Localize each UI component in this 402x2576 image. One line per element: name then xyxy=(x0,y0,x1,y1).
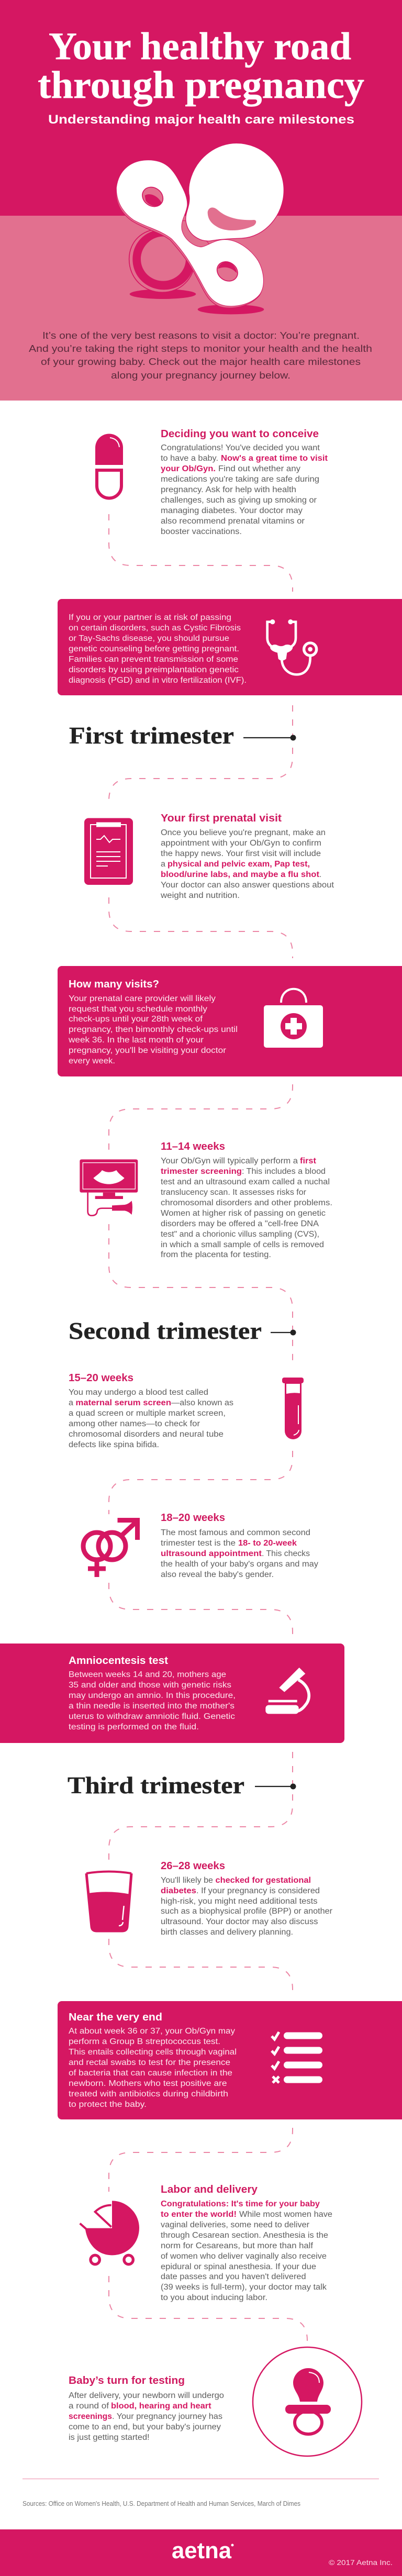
text block: 18-20 weeks xyxy=(161,1512,318,1579)
text block: 26-28 weeks: such as a biophysical profile (BPP) or another xyxy=(161,1907,332,1916)
title xyxy=(38,25,364,107)
heading: first trimester: First trimester xyxy=(69,723,234,749)
text block: first prenatal visit: . xyxy=(319,870,321,879)
text block: 15-20 weeks xyxy=(69,1372,233,1449)
text block: 11-14 weeks: trimester screening xyxy=(161,1167,242,1176)
text block: deciding you want to conceive: to have a baby. xyxy=(161,454,218,463)
text block: 26-28 weeks: 26–28 weeks xyxy=(161,1860,225,1872)
text block: 26-28 weeks: birth classes and delivery planning. xyxy=(161,1928,293,1937)
text block: 18-20 weeks: trimester test is the xyxy=(161,1539,236,1548)
text block: deciding you want to conceive: pregnancy. Ask for help with health xyxy=(161,485,296,494)
text: amniocentesis body: testing is performed on the fluid. xyxy=(69,1723,199,1731)
connector: path to near the very end panel xyxy=(109,1939,293,1993)
icon: clipboard xyxy=(84,818,133,885)
text: amniocentesis body: uterus to withdraw amniotic fluid. Genetic xyxy=(69,1712,235,1721)
text block: 15-20 weeks: defects like spina bifida. xyxy=(69,1440,159,1449)
text block: deciding you want to conceive: managing diabetes. Your doctor may xyxy=(161,506,303,515)
marker: first trimester xyxy=(243,735,296,740)
text block: baby's turn for testing: Baby’s turn for testing xyxy=(69,2375,185,2386)
text block: 11-14 weeks: from the placenta for testing. xyxy=(161,1250,271,1259)
text block: deciding you want to conceive: also recommend prenatal vitamins or xyxy=(161,517,305,526)
text block: baby's turn for testing: a round of xyxy=(69,2402,109,2411)
text block: 26-28 weeks: . If your pregnancy is considered xyxy=(196,1886,320,1895)
icon: checklist xyxy=(272,2032,322,2083)
text block: first prenatal visit: blood/urine labs, and maybe a flu shot xyxy=(161,870,319,879)
text: visits body xyxy=(68,994,238,1065)
text: near the very end body xyxy=(69,2027,237,2109)
text: near the very end body: to protect the baby. xyxy=(69,2100,147,2109)
text block: deciding you want to conceive xyxy=(161,428,328,536)
panel: hero header xyxy=(0,0,402,401)
text block: labor and delivery: to you about inducing labor. xyxy=(161,2293,267,2302)
text block: 15-20 weeks: among other names—to check for xyxy=(69,1419,200,1428)
text block: baby's turn for testing xyxy=(69,2375,224,2442)
text block: first prenatal visit: weight and nutrition. xyxy=(160,891,240,900)
text: visits body: Your prenatal care provider will likely xyxy=(69,994,216,1003)
text block: labor and delivery: (39 weeks is full-term), your doctor may talk xyxy=(161,2283,327,2292)
text block: 11-14 weeks: disorders may be offered a "cell-free DNA xyxy=(161,1219,319,1228)
text block: 11-14 weeks xyxy=(161,1141,332,1259)
text block: 18-20 weeks: ultrasound appointment xyxy=(161,1549,262,1558)
text: visits body: pregnancy, then bimonthly check-ups until xyxy=(69,1025,238,1034)
text block: 15-20 weeks: chromosomal disorders and neural tube xyxy=(69,1430,224,1439)
text block: 15-20 weeks: maternal serum screen xyxy=(75,1398,171,1407)
panel: near the very end xyxy=(58,2001,402,2119)
text: visits body: check-ups until your 28th week of xyxy=(69,1015,203,1024)
text block: 26-28 weeks: ultrasound. Your doctor may also discuss xyxy=(161,1917,318,1926)
text block: 11-14 weeks: test and an ultrasound exam called a nuchal xyxy=(161,1178,330,1186)
intro text: of your growing baby. Check out the major health care milestones xyxy=(41,357,361,367)
text block: labor and delivery: norm for Cesareans, but more than half xyxy=(161,2241,314,2250)
text block: 11-14 weeks: translucency scan. It assesses risks for xyxy=(161,1188,306,1197)
text: amniocentesis body: 35 and older and those with genetic risks xyxy=(69,1681,231,1690)
text block: 18-20 weeks: 18–20 weeks xyxy=(161,1512,225,1524)
connector: path through second trimester xyxy=(109,1224,293,1365)
text block: 15-20 weeks: a quad screen or multiple market screen, xyxy=(69,1409,226,1418)
intro text: And you’re taking the right steps to monitor your health and the health xyxy=(29,343,372,354)
text block: 11-14 weeks: 11–14 weeks xyxy=(161,1141,225,1152)
icon: large pacifier illustration xyxy=(116,143,284,314)
text: visits body: pregnancy, you'll be visiting your doctor xyxy=(69,1046,226,1055)
text block: baby's turn for testing: is just getting started! xyxy=(69,2433,150,2442)
text: amniocentesis body: may undergo an amnio. In this procedure, xyxy=(69,1691,236,1700)
text block: baby's turn for testing: come to an end, but your baby's journey xyxy=(69,2423,221,2431)
text: genetic counseling body: If you or your partner is at risk of passing xyxy=(69,613,231,622)
connector: path to visits panel xyxy=(109,897,293,958)
logo: aetna: aetna xyxy=(172,2538,232,2563)
text block: deciding you want to conceive: booster vaccinations. xyxy=(161,527,242,536)
text: genetic counseling body: disorders by using preimplantation genetic xyxy=(69,665,239,674)
text block: 11-14 weeks: first xyxy=(300,1157,316,1165)
text block: 18-20 weeks: 18- to 20-week xyxy=(238,1539,297,1548)
connector: path to labor and delivery xyxy=(109,2128,293,2192)
icon: microscope xyxy=(265,1668,309,1714)
text block: baby's turn for testing: screenings xyxy=(69,2412,112,2421)
text block: 11-14 weeks: chromosomal disorders and other problems. xyxy=(161,1198,332,1207)
sources: Sources: Office on Women's Health, U.S. Department of Health and Human Services, March of Dimes xyxy=(23,2500,300,2507)
text: genetic counseling body: on certain disorders, such as Cystic Fibrosis xyxy=(69,624,241,632)
text block: deciding you want to conceive: Find out whether any xyxy=(218,464,300,473)
text block: deciding you want to conceive: Deciding you want to conceive xyxy=(161,428,319,440)
text block: labor and delivery: Labor and delivery xyxy=(161,2184,258,2195)
icon: first aid kit xyxy=(264,989,323,1048)
icon: capsule xyxy=(95,434,123,498)
text block: baby's turn for testing: After delivery, your newborn will undergo xyxy=(69,2391,224,2400)
text block: 26-28 weeks xyxy=(161,1860,332,1937)
text block: 26-28 weeks: diabetes xyxy=(161,1886,196,1895)
text block: deciding you want to conceive: challenges, such as giving up smoking or xyxy=(161,496,317,505)
text: near the very end body: treated with antibiotics during childbirth xyxy=(69,2090,228,2098)
text block: first prenatal visit: Your doctor can also answer questions about xyxy=(161,881,334,890)
text block: 26-28 weeks: checked for gestational xyxy=(216,1876,311,1885)
text block: 15-20 weeks: a xyxy=(69,1398,73,1407)
connector: path to genetic counseling panel xyxy=(109,514,293,592)
text block: deciding you want to conceive: Now's a great time to visit xyxy=(221,454,328,463)
text: genetic counseling body xyxy=(69,613,247,685)
text: genetic counseling body: or Tay-Sachs disease, you should pursue xyxy=(69,634,229,643)
text block: first prenatal visit: a xyxy=(161,860,165,869)
text: near the very end body: newborn. Mothers who test positive are xyxy=(69,2079,227,2088)
text block: deciding you want to conceive: medications you're taking are safe during xyxy=(161,475,319,484)
icon: test tube xyxy=(282,1378,304,1439)
intro text: along your pregnancy journey below. xyxy=(111,370,291,381)
text: genetic counseling body: diagnosis (PGD) and in vitro fertilization (IVF). xyxy=(69,676,247,685)
icon: pacifier in circle xyxy=(253,2347,362,2456)
connector: path to 18-20 weeks xyxy=(109,1451,293,1514)
text block: baby's turn for testing: blood, hearing and heart xyxy=(111,2402,211,2411)
panel heading: how many visits: How many visits? xyxy=(69,979,159,990)
text block: labor and delivery: While most women have xyxy=(239,2210,332,2219)
intro text xyxy=(29,330,372,381)
text block: first prenatal visit: Once you believe you're pregnant, make an xyxy=(161,828,326,837)
icon: glass of glucose drink xyxy=(86,1871,131,1931)
text: amniocentesis body xyxy=(69,1670,236,1731)
text block: 11-14 weeks: Your Ob/Gyn will typically perform a xyxy=(161,1157,298,1165)
text: visits body: request that you schedule monthly xyxy=(69,1005,207,1014)
text block: first prenatal visit: Your first prenatal visit xyxy=(161,813,282,824)
intro text: It’s one of the very best reasons to visit a doctor: You’re pregnant. xyxy=(42,330,360,341)
text block: 26-28 weeks: high-risk, you might need additional tests xyxy=(161,1897,318,1906)
panel: genetic counseling xyxy=(58,599,402,695)
text block: first prenatal visit: physical and pelvic exam, Pap test, xyxy=(168,860,310,869)
text: near the very end body: and rectal swabs to test for the presence xyxy=(69,2058,230,2067)
text block: labor and delivery: Congratulations: It's time for your baby xyxy=(161,2200,320,2208)
icon: stethoscope xyxy=(267,619,317,674)
text block: 18-20 weeks: The most famous and common second xyxy=(161,1528,310,1537)
text block: first prenatal visit: appointment with your Ob/Gyn to confirm xyxy=(161,839,321,848)
text block: first prenatal visit xyxy=(160,813,334,900)
text block: labor and delivery xyxy=(161,2184,332,2302)
text block: 15-20 weeks: You may undergo a blood test called xyxy=(69,1388,208,1397)
text: near the very end body: of bacteria that can cause infection in the xyxy=(69,2069,232,2078)
text block: 15-20 weeks: —also known as xyxy=(171,1398,233,1407)
footer xyxy=(0,2529,402,2576)
text: amniocentesis body: Between weeks 14 and 20, mothers age xyxy=(69,1670,226,1679)
panel: how many visits xyxy=(58,966,402,1076)
text: amniocentesis body: a thin needle is inserted into the mother's xyxy=(69,1702,234,1711)
heading: second trimester: Second trimester xyxy=(69,1318,262,1344)
icon: gender symbols xyxy=(83,1520,137,1577)
text block: 18-20 weeks: . This checks xyxy=(262,1549,310,1558)
text: near the very end body: This entails collecting cells through vaginal xyxy=(69,2048,237,2057)
marker: third trimester xyxy=(255,1783,296,1790)
title: Your healthy road xyxy=(49,25,351,68)
subtitle: Understanding major health care milestones xyxy=(48,113,354,127)
text block: labor and delivery: vaginal deliveries, some need to deliver xyxy=(161,2220,309,2229)
text block: 18-20 weeks: the health of your baby's organs and may xyxy=(161,1560,318,1569)
panel heading: near the very end: Near the very end xyxy=(69,2012,162,2023)
text: genetic counseling body: genetic counseling before getting pregnant. xyxy=(69,645,239,653)
connector: path to baby testing circle xyxy=(109,2276,307,2344)
text block: labor and delivery: date passes and you haven't delivered xyxy=(161,2272,306,2281)
panel heading: amniocentesis: Amniocentesis test xyxy=(69,1655,168,1667)
text block: 11-14 weeks: : This includes a blood xyxy=(242,1167,326,1176)
text block: baby's turn for testing: . Your pregnancy journey has xyxy=(112,2412,222,2421)
icon: ultrasound machine xyxy=(80,1159,138,1216)
text block: labor and delivery: to enter the world! xyxy=(161,2210,237,2219)
text block: 11-14 weeks: Women at higher risk of passing on genetic xyxy=(161,1209,326,1218)
connector: path through third trimester xyxy=(109,1752,293,1865)
title: through pregnancy xyxy=(38,64,364,107)
connector: path to amniocentesis panel xyxy=(109,1583,293,1636)
text block: 26-28 weeks: You'll likely be xyxy=(161,1876,213,1885)
text block: 11-14 weeks: test" and a chorionic villus sampling (CVS), xyxy=(161,1230,319,1239)
text: visits body: week 36. In the last month of your xyxy=(68,1036,204,1045)
text block: 15-20 weeks: 15–20 weeks xyxy=(69,1372,133,1384)
text block: 18-20 weeks: also reveal the baby's gender. xyxy=(161,1570,274,1579)
text: visits body: every week. xyxy=(69,1057,115,1065)
text: genetic counseling body: Families can prevent transmission of some xyxy=(69,655,238,664)
text block: deciding you want to conceive: your Ob/Gyn. xyxy=(161,464,216,473)
text: near the very end body: At about week 36 or 37, your Ob/Gyn may xyxy=(69,2027,235,2036)
icon: baby stroller xyxy=(80,2201,139,2264)
copyright: © 2017 Aetna Inc. xyxy=(329,2558,393,2567)
panel: amniocentesis test xyxy=(0,1644,344,1743)
text block: labor and delivery: epidural or spinal anesthesia. If your due xyxy=(161,2262,316,2271)
connector: path to 11-14 weeks xyxy=(109,1084,293,1153)
text block: first prenatal visit: the happy news. Your first visit will include xyxy=(161,849,321,858)
text block: labor and delivery: through Cesarean section. Anesthesia is the xyxy=(161,2231,328,2240)
text: near the very end body: perform a Group B streptococcus test. xyxy=(69,2037,220,2046)
heading: third trimester: Third trimester xyxy=(68,1772,244,1798)
marker: second trimester xyxy=(271,1330,296,1335)
connector: path through first trimester xyxy=(109,705,293,806)
text block: labor and delivery: of women who deliver vaginally also receive xyxy=(161,2252,327,2261)
text block: 11-14 weeks: in which a small sample of cells is removed xyxy=(161,1240,324,1249)
text block: deciding you want to conceive: Congratulations! You've decided you want xyxy=(161,443,320,452)
